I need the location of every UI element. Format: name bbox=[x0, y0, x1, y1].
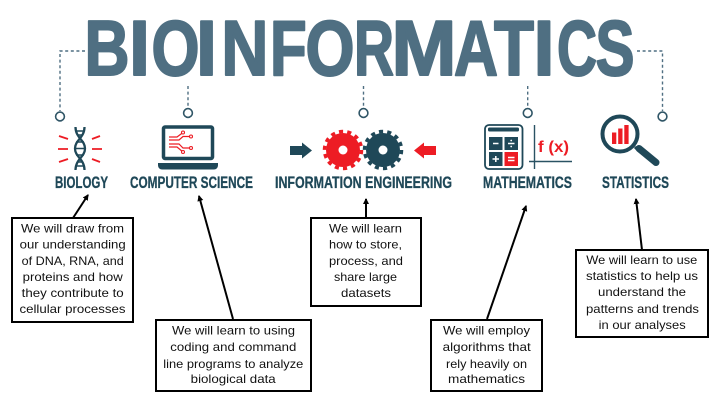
callout: biology bbox=[12, 218, 133, 322]
label: mathematics: MATHEMATICS bbox=[483, 174, 572, 192]
icon: red arrow pointing left bbox=[414, 142, 436, 158]
callout: biology: of DNA, RNA, and bbox=[22, 254, 124, 268]
title: O bbox=[306, 4, 354, 92]
callout: information engineering: datasets bbox=[341, 286, 391, 300]
arrow: statistics callout to label bbox=[636, 199, 642, 250]
title: C bbox=[557, 4, 597, 92]
title: M bbox=[392, 4, 456, 92]
callout: computer science: We will learn to using bbox=[172, 324, 295, 338]
icon: laptop bbox=[158, 127, 218, 170]
connector: information engineering bbox=[359, 86, 368, 117]
callout: mathematics: We will employ bbox=[443, 324, 530, 338]
title: N bbox=[221, 4, 268, 92]
callout: statistics: We will learn to use bbox=[586, 253, 698, 267]
callout: computer science: biological data bbox=[191, 372, 276, 386]
connector: computer science bbox=[184, 86, 192, 117]
label: information engineering: INFORMATION ENGINEERING bbox=[275, 174, 452, 192]
title: R bbox=[354, 4, 394, 92]
icon: red gear bbox=[324, 132, 362, 168]
callout: mathematics: algorithms that bbox=[443, 340, 531, 354]
callout: biology: We will draw from bbox=[21, 222, 124, 236]
callout: mathematics: mathematics bbox=[448, 372, 525, 386]
callout: statistics: patterns and trends bbox=[586, 302, 699, 316]
label: biology: BIOLOGY bbox=[55, 174, 108, 192]
callout: information engineering: how to store, bbox=[329, 238, 402, 252]
arrow: biology callout to label bbox=[73, 195, 88, 218]
callout: information engineering: We will learn bbox=[329, 222, 402, 236]
callout: biology: our understanding bbox=[20, 238, 126, 252]
title: O bbox=[152, 4, 200, 92]
callout: computer science bbox=[156, 320, 311, 391]
callout: mathematics bbox=[431, 320, 542, 391]
title: A bbox=[454, 4, 498, 92]
icon: dark arrow pointing right bbox=[290, 142, 312, 158]
icon: DNA helix bbox=[58, 127, 102, 170]
title: I bbox=[534, 4, 554, 92]
callout: statistics bbox=[576, 250, 708, 337]
icon: magnifying glass with bar chart bbox=[602, 116, 656, 162]
title: I bbox=[129, 4, 150, 92]
icon: calculator and function graph bbox=[485, 125, 572, 169]
label: statistics: STATISTICS bbox=[602, 174, 669, 192]
title: S bbox=[596, 4, 634, 92]
callout: information engineering: share large bbox=[334, 270, 397, 284]
callout: statistics: in our analyses bbox=[599, 318, 686, 332]
label: computer science: COMPUTER SCIENCE bbox=[130, 174, 253, 192]
connector: mathematics bbox=[523, 86, 532, 117]
callout: mathematics: rely heavily on bbox=[446, 357, 527, 371]
arrow: information engineering callout to label bbox=[365, 199, 367, 218]
callout: biology: proteins and how bbox=[23, 270, 123, 284]
connector: statistics bbox=[637, 51, 667, 121]
icon: dark gear bbox=[364, 132, 402, 168]
callout: biology: cellular processes bbox=[20, 302, 126, 316]
title: T bbox=[494, 4, 534, 92]
title: I bbox=[196, 4, 217, 92]
callout: computer science: line programs to analyze bbox=[163, 357, 304, 371]
callout: information engineering: process, and bbox=[329, 254, 403, 268]
icon: calculator and function graph: f (x) bbox=[538, 139, 569, 156]
connector: biology bbox=[56, 51, 85, 121]
callout: statistics: statistics to help us bbox=[586, 269, 698, 283]
callout: computer science: coding and command bbox=[170, 340, 296, 354]
arrow: computer science callout to label bbox=[199, 196, 233, 319]
callout: information engineering bbox=[311, 218, 421, 306]
arrow: mathematics callout to label bbox=[487, 206, 526, 319]
title: B bbox=[84, 4, 130, 92]
callout: statistics: understand the bbox=[598, 285, 686, 299]
title: F bbox=[270, 4, 307, 92]
callout: biology: they contribute to bbox=[22, 286, 124, 300]
